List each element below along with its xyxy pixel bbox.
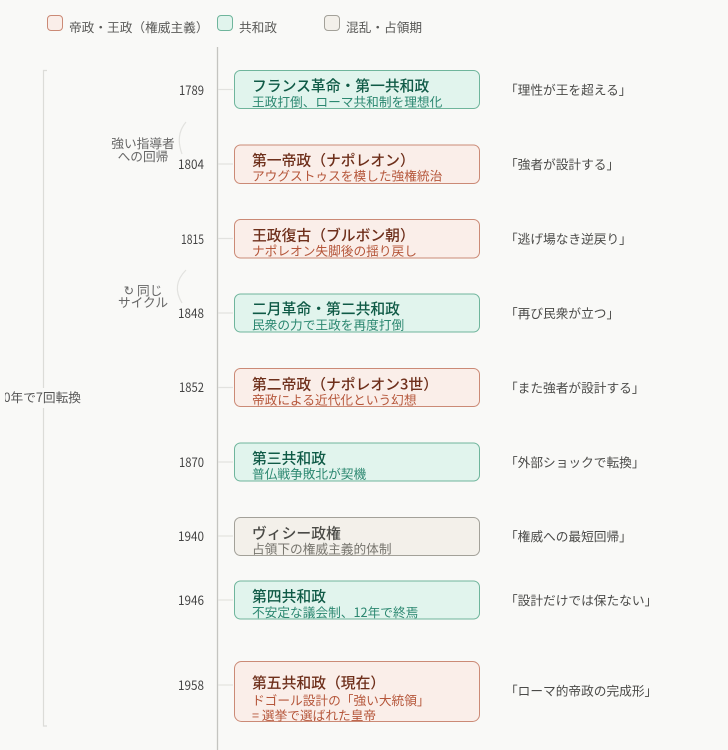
row: 1815 xyxy=(181,220,632,260)
row: 1940: ヴィシー政権 xyxy=(252,522,341,544)
legend: turmoil swatch xyxy=(324,16,340,30)
annotation: return to strong leader: への回帰 xyxy=(118,146,168,165)
row: 1789: 王政打倒、ローマ共和制を理想化 xyxy=(252,92,443,110)
row: 1848: 民衆の力で王政を再度打倒 xyxy=(252,314,404,334)
row: 1870: 第三共和政 xyxy=(252,448,326,468)
row: 1815: ナポレオン失脚後の揺り戻し xyxy=(252,240,417,260)
legend: monarchy label: 帝政・王政（権威主義） xyxy=(69,17,209,36)
row: 1804 xyxy=(178,145,619,184)
row: 1852: 「また強者が設計する」 xyxy=(505,378,645,396)
row: 1946 xyxy=(178,581,657,621)
row: 1804: 「強者が設計する」 xyxy=(505,154,619,173)
row: 1958: ドゴール設計の「強い大統領」 xyxy=(252,690,430,709)
annotation: same cycle: ↻ 同じ xyxy=(124,280,162,299)
row: 1804: 第一帝政（ナポレオン） xyxy=(252,150,415,170)
row: 1958: 1958 xyxy=(178,675,204,694)
row: 1804: アウグストゥスを模した強権統治 xyxy=(252,166,443,184)
annotation: same cycle xyxy=(118,270,186,311)
row: 1848 xyxy=(178,294,619,334)
row: 1848: 「再び民衆が立つ」 xyxy=(505,303,619,322)
row: 1958 xyxy=(178,662,657,724)
row: 1940: 占領下の権威主義的体制 xyxy=(252,538,392,558)
legend: republic swatch xyxy=(218,16,232,30)
row: 1940: 「権威への最短回帰」 xyxy=(505,526,632,545)
legend: turmoil label: 混乱・占領期 xyxy=(346,17,422,36)
row: 1946: 第四共和政 xyxy=(252,586,326,606)
annotation: return to strong leader: 強い指導者 xyxy=(111,133,175,152)
row: 1940 xyxy=(178,518,632,558)
row: 1815: 「逃げ場なき逆戻り」 xyxy=(505,228,632,248)
legend: republic label: 共和政 xyxy=(239,17,277,36)
row: 1870 xyxy=(179,443,645,482)
row: 1789: フランス革命・第一共和政 xyxy=(252,75,429,96)
row: 1789: 1789 xyxy=(179,80,204,99)
row: 1946: 1946 xyxy=(178,590,204,609)
row: 1870: 「外部ショックで転換」 xyxy=(505,452,645,471)
row: 1815: 王政復古（ブルボン朝） xyxy=(252,224,415,246)
bracket background behind label xyxy=(0,388,84,408)
legend: monarchy swatch xyxy=(48,16,62,30)
row: 1946: 「設計だけでは保たない」 xyxy=(505,590,657,609)
row: 1804: 1804 xyxy=(178,154,204,173)
row: 1940: 1940 xyxy=(178,526,204,545)
row: 1870: 普仏戦争敗北が契機 xyxy=(252,464,366,482)
bracket: whole period xyxy=(44,70,47,726)
row: 1815: 1815 xyxy=(181,229,204,248)
row: 1870: 1870 xyxy=(179,452,204,471)
timeline axis xyxy=(216,47,218,750)
row: 1958: 第五共和政（現在） xyxy=(252,672,385,693)
legend xyxy=(48,16,422,36)
annotation: return to strong leader xyxy=(111,122,186,165)
row: 1852: 第二帝政（ナポレオン3世） xyxy=(252,374,438,394)
row: 1852: 1852 xyxy=(179,377,204,396)
row: 1946: 不安定な議会制、12年で終焉 xyxy=(252,602,418,621)
row: 1789: 「理性が王を超える」 xyxy=(505,80,632,98)
row: 1852: 帝政による近代化という幻想 xyxy=(252,390,417,408)
annotation: same cycle: サイクル xyxy=(118,292,168,311)
row: 1958: 「ローマ的帝政の完成形」 xyxy=(505,680,657,700)
row: 1848: 1848 xyxy=(178,303,204,322)
row: 1789 xyxy=(179,70,632,110)
row: 1958: = 選挙で選ばれた皇帝 xyxy=(252,705,376,724)
row: 1852 xyxy=(179,368,645,408)
row: 1848: 二月革命・第二共和政 xyxy=(252,298,400,319)
